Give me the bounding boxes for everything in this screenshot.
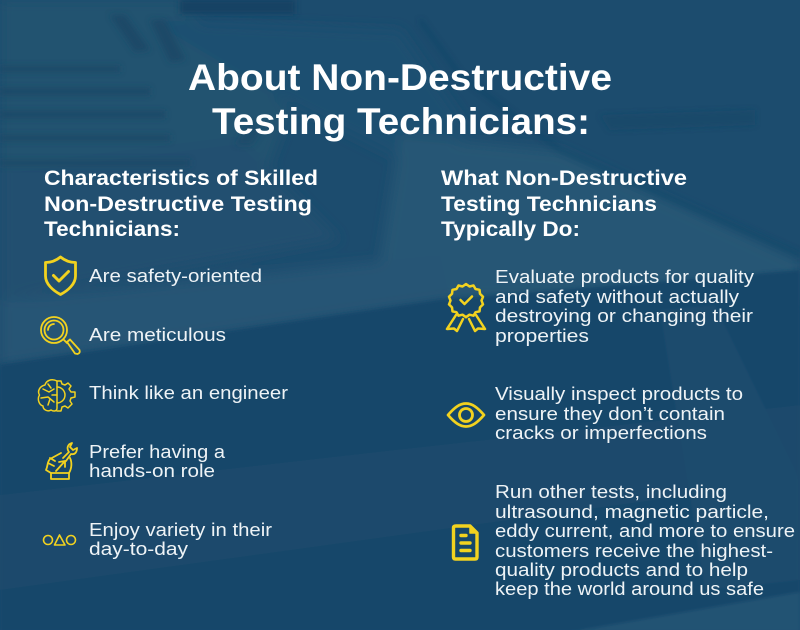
heading: what technicians do: What Non-Destructive xyxy=(441,167,687,190)
heading: characteristics: Non-Destructive Testing xyxy=(44,193,312,216)
heading: characteristics: Characteristics of Skilled xyxy=(44,167,318,190)
panel: characteristics xyxy=(38,167,318,559)
text: other tests: keep the world around us safe xyxy=(495,578,764,599)
text: hands-on role xyxy=(89,441,226,481)
heading: what technicians do xyxy=(441,167,687,241)
title: About Non-Destructive xyxy=(188,57,612,98)
text: hands-on role: hands-on role xyxy=(89,460,215,481)
panel: what technicians do xyxy=(441,167,795,599)
icon: document xyxy=(454,526,477,559)
icon: shield with check xyxy=(46,257,76,294)
title: Testing Technicians: xyxy=(212,101,590,142)
icon: eye xyxy=(448,404,484,426)
text: evaluate: and safety without actually xyxy=(495,286,740,307)
heading: characteristics: Technicians: xyxy=(44,218,180,241)
icon: circle triangle circle xyxy=(44,535,76,545)
text: evaluate: Evaluate products for quality xyxy=(495,266,755,287)
text: hands-on role: Prefer having a xyxy=(89,441,226,462)
text: visually inspect xyxy=(495,383,743,443)
text: variety xyxy=(89,519,272,559)
icon: brain and gear xyxy=(38,380,75,411)
text: other tests: customers receive the highest- xyxy=(495,540,773,561)
text: other tests: Run other tests, including xyxy=(495,481,727,502)
heading: what technicians do: Testing Technicians xyxy=(441,193,657,216)
text: evaluate: destroying or changing their xyxy=(495,305,753,326)
text: visually inspect: ensure they don’t contain xyxy=(495,403,725,424)
text: other tests xyxy=(495,481,795,599)
text: variety: day-to-day xyxy=(89,538,189,559)
text: safety-oriented: Are safety-oriented xyxy=(89,265,262,286)
text: other tests: ultrasound, magnetic particle, xyxy=(495,501,769,522)
text: evaluate: properties xyxy=(495,325,589,346)
text: variety: Enjoy variety in their xyxy=(89,519,272,540)
heading: characteristics xyxy=(44,167,318,241)
text: engineer: Think like an engineer xyxy=(89,382,288,403)
text: meticulous: Are meticulous xyxy=(89,324,226,345)
icon: hand holding wrench xyxy=(46,443,77,479)
icon: award ribbon xyxy=(447,284,485,331)
heading: what technicians do: Typically Do: xyxy=(441,218,580,241)
title xyxy=(188,57,612,142)
icon: magnifying glass xyxy=(41,317,80,354)
text: visually inspect: cracks or imperfections xyxy=(495,422,707,443)
text: visually inspect: Visually inspect products to xyxy=(495,383,743,404)
text: evaluate xyxy=(495,266,755,346)
text: other tests: eddy current, and more to ensure xyxy=(495,520,795,541)
text: other tests: quality products and to help xyxy=(495,559,748,580)
